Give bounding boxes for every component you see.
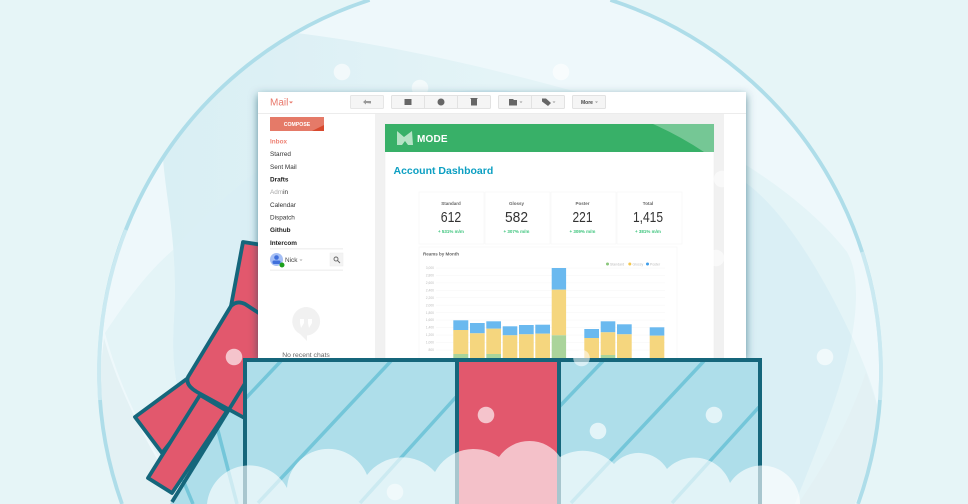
sidebar mail labels: Github xyxy=(270,227,291,234)
chart axis labels: 2,400 xyxy=(426,288,434,292)
stat card: standard: + 531% m/m xyxy=(438,229,464,234)
bow ribbon strip xyxy=(148,395,227,493)
chart gridlines xyxy=(436,290,665,298)
chart axis labels xyxy=(426,266,434,352)
compose button xyxy=(270,117,324,131)
stat card: glossy: + 307% m/m xyxy=(504,229,529,234)
sidebar mail labels: Drafts xyxy=(270,176,289,184)
window shadow xyxy=(258,92,746,358)
chart axis labels: 3,000 xyxy=(426,266,434,270)
user chat row xyxy=(270,248,343,271)
user chat row: Nick xyxy=(285,257,298,264)
dashboard title: Account Dashboard xyxy=(394,165,493,177)
mode header banner xyxy=(385,124,714,152)
stat card: poster: Poster xyxy=(575,201,590,206)
sidebar mail labels: Inbox xyxy=(270,138,287,146)
chart axis labels: 2,600 xyxy=(426,281,434,285)
gift box xyxy=(245,360,760,504)
no recent chats text: No recent chats xyxy=(282,352,330,359)
globe shading: blob overlap xyxy=(474,90,852,494)
sidebar mail labels: Dispatch xyxy=(270,214,295,222)
chart legend xyxy=(606,262,661,266)
globe shading: lower right sheen xyxy=(798,372,877,504)
bow knot xyxy=(187,302,300,421)
chart axis labels: 1,000 xyxy=(426,341,434,345)
compose button: COMPOSE xyxy=(284,122,311,128)
box right panel xyxy=(559,360,760,504)
chart legend: Glossy xyxy=(632,262,643,266)
bow upper tail xyxy=(231,242,295,328)
globe highlight left xyxy=(99,230,126,400)
stat card: total: 1,415 xyxy=(633,210,663,226)
chart bars xyxy=(453,268,664,366)
chart axis labels: 1,800 xyxy=(426,311,434,315)
hangouts icon xyxy=(292,307,320,341)
chart axis labels: 800 xyxy=(428,348,434,352)
stat card: standard: 612 xyxy=(441,210,461,226)
sidebar mail labels xyxy=(270,138,297,247)
stat card: total: + 381% m/m xyxy=(635,229,661,234)
email card xyxy=(386,152,714,358)
stat card: glossy: Glossy xyxy=(509,201,524,206)
chart legend: Standard xyxy=(610,262,624,266)
sidebar mail labels: Intercom xyxy=(270,240,297,247)
globe shading: lower blob xyxy=(105,250,876,500)
stat card: poster xyxy=(570,202,596,233)
ribbon edge line xyxy=(172,377,249,502)
sidebar mail labels: Sent Mail xyxy=(270,164,297,171)
content background xyxy=(375,114,724,364)
glass reflection lines xyxy=(246,361,759,503)
box left panel xyxy=(245,360,457,504)
chart axis labels: 2,200 xyxy=(426,296,434,300)
bubbles behind window xyxy=(334,64,569,96)
chart axis labels: 1,600 xyxy=(426,318,434,322)
chart legend: Poster xyxy=(650,262,661,266)
globe shading: lower left sheen xyxy=(101,340,176,504)
mode header banner: MODE xyxy=(417,134,448,145)
mail caret xyxy=(289,102,293,104)
sidebar mail labels: Admin xyxy=(270,189,289,196)
chart axis labels: 1,200 xyxy=(426,333,434,337)
globe highlight right xyxy=(862,252,881,400)
floating snow bubbles xyxy=(226,171,833,500)
sidebar mail labels: Calendar xyxy=(270,202,297,209)
stat card: standard: Standard xyxy=(441,201,461,206)
stat card: standard xyxy=(438,202,464,233)
box outlines xyxy=(245,360,760,504)
toolbar: reply button xyxy=(350,96,384,108)
chart axis labels: 2,000 xyxy=(426,303,434,307)
chart axis labels: 1,400 xyxy=(426,326,434,330)
stat card: glossy: 582 xyxy=(505,210,528,226)
bow xyxy=(135,242,300,502)
toolbar: more button xyxy=(572,96,606,108)
stat card: poster: 221 xyxy=(572,210,592,226)
toolbar: folder and label buttons xyxy=(498,96,564,108)
mail label: Mail xyxy=(270,98,288,108)
toolbar divider xyxy=(258,113,746,114)
sidebar mail labels: Starred xyxy=(270,151,291,158)
toolbar: archive, spam, delete buttons xyxy=(392,96,490,108)
chart title: Reams by Month xyxy=(423,252,459,256)
chart axis labels: 2,800 xyxy=(426,274,434,278)
globe shading: upper blob xyxy=(163,34,856,336)
toolbar: more button: More xyxy=(581,100,593,106)
snow clouds xyxy=(207,441,800,504)
stat card: total xyxy=(634,202,662,233)
gift box side panel xyxy=(170,375,250,504)
stat card: glossy xyxy=(504,202,530,233)
stat card: poster: + 309% m/m xyxy=(570,229,595,234)
bow left tail xyxy=(135,378,205,453)
box ribbon xyxy=(457,360,559,504)
chart: reams by month xyxy=(423,252,665,358)
stat card: total: Total xyxy=(643,201,653,206)
email window xyxy=(258,92,746,367)
